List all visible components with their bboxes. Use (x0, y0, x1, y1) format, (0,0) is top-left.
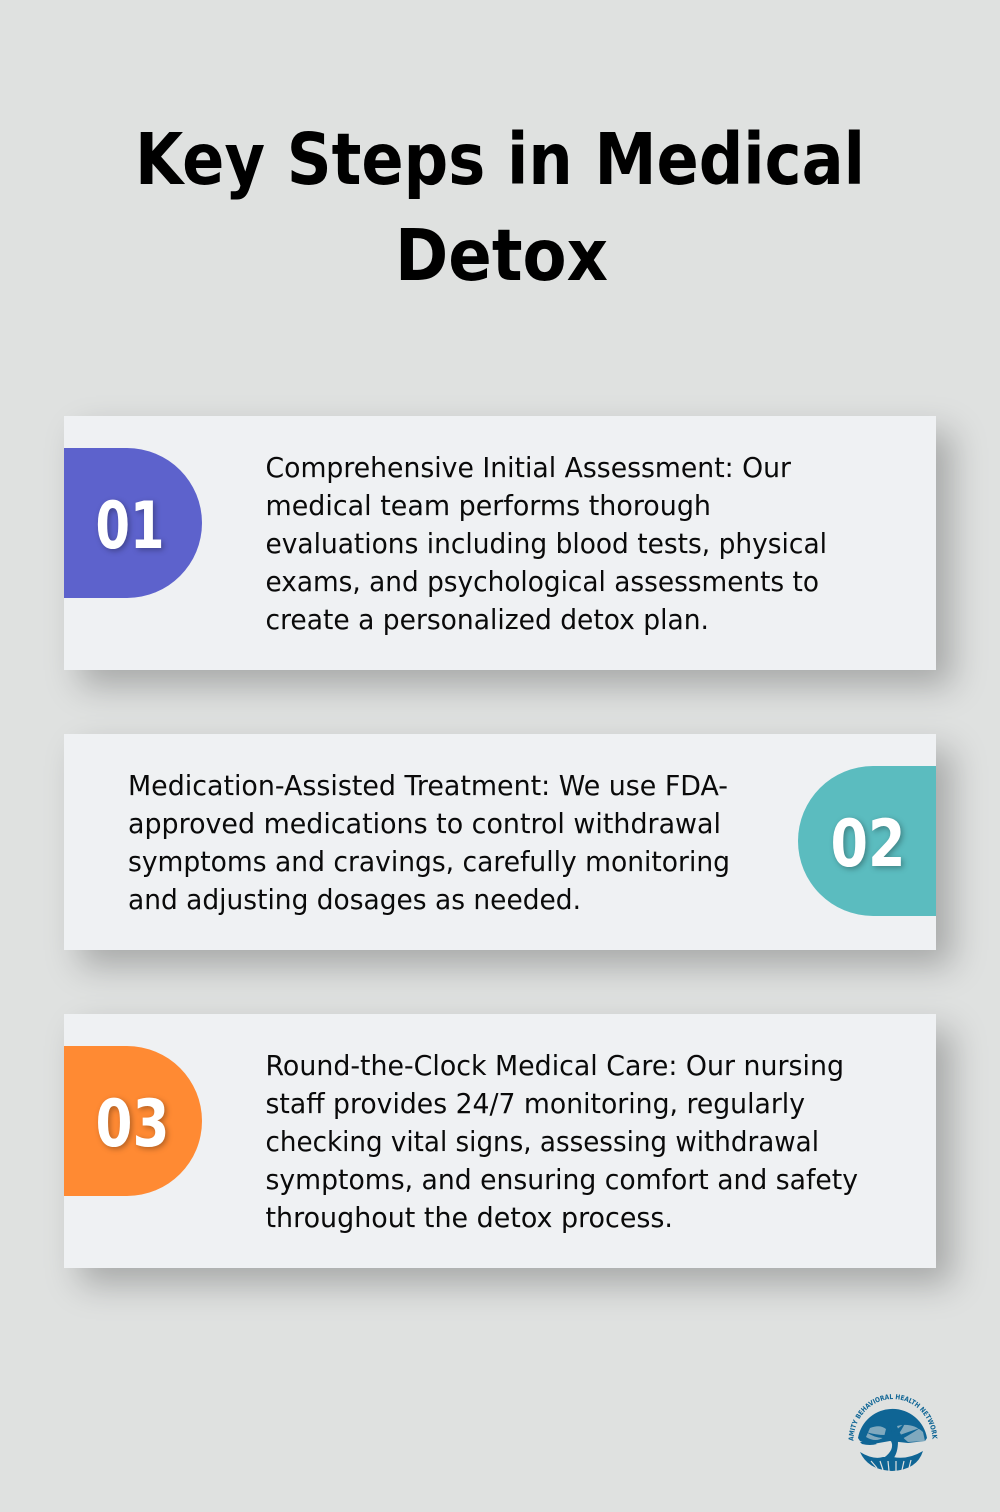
text: step 3 description (266, 1049, 858, 1234)
text: step 1 description: evaluations including blood tests, physical (266, 527, 827, 560)
text: step 3 description: checking vital signs, assessing withdrawal (266, 1125, 819, 1158)
text: step 1 description: medical team performs thorough (266, 489, 711, 522)
badge: 01 (64, 448, 202, 598)
text: step 1 description: create a personalized detox plan. (266, 603, 709, 636)
text: step 2 description: symptoms and cravings, carefully monitoring (128, 845, 730, 878)
panel: step 3 (64, 1014, 936, 1268)
text: step 3 description: symptoms, and ensuring comfort and safety (266, 1163, 858, 1196)
text: step 2 description: approved medications to control withdrawal (128, 807, 721, 840)
badge: 02 (798, 766, 936, 916)
title: Detox (395, 214, 608, 297)
number 03: 03 (96, 1087, 170, 1162)
text: step 1 description: exams, and psychological assessments to (266, 565, 819, 598)
text: step 2 description (128, 769, 730, 916)
title (135, 118, 865, 297)
text: step 3 description: staff provides 24/7 monitoring, regularly (266, 1087, 805, 1120)
badge: 03 (64, 1046, 202, 1196)
text: step 3 description: throughout the detox process. (266, 1201, 673, 1234)
icon: Amity Behavioral Health Network logo (848, 1394, 938, 1471)
text: step 3 description: Round-the-Clock Medical Care: Our nursing (266, 1049, 844, 1082)
panel: step 2 (64, 734, 936, 950)
text: step 2 description: and adjusting dosages as needed. (128, 883, 581, 916)
text: step 1 description: Comprehensive Initial Assessment: Our (266, 451, 792, 484)
number 01: 01 (96, 489, 164, 564)
panel: step 1 (64, 416, 936, 670)
text: step 1 description (266, 451, 827, 636)
number 02: 02 (830, 807, 906, 882)
icon: Amity Behavioral Health Network logo: AMITY BEHAVIORAL HEALTH NETWORK (848, 1394, 938, 1441)
text: step 2 description: Medication-Assisted Treatment: We use FDA- (128, 769, 728, 802)
